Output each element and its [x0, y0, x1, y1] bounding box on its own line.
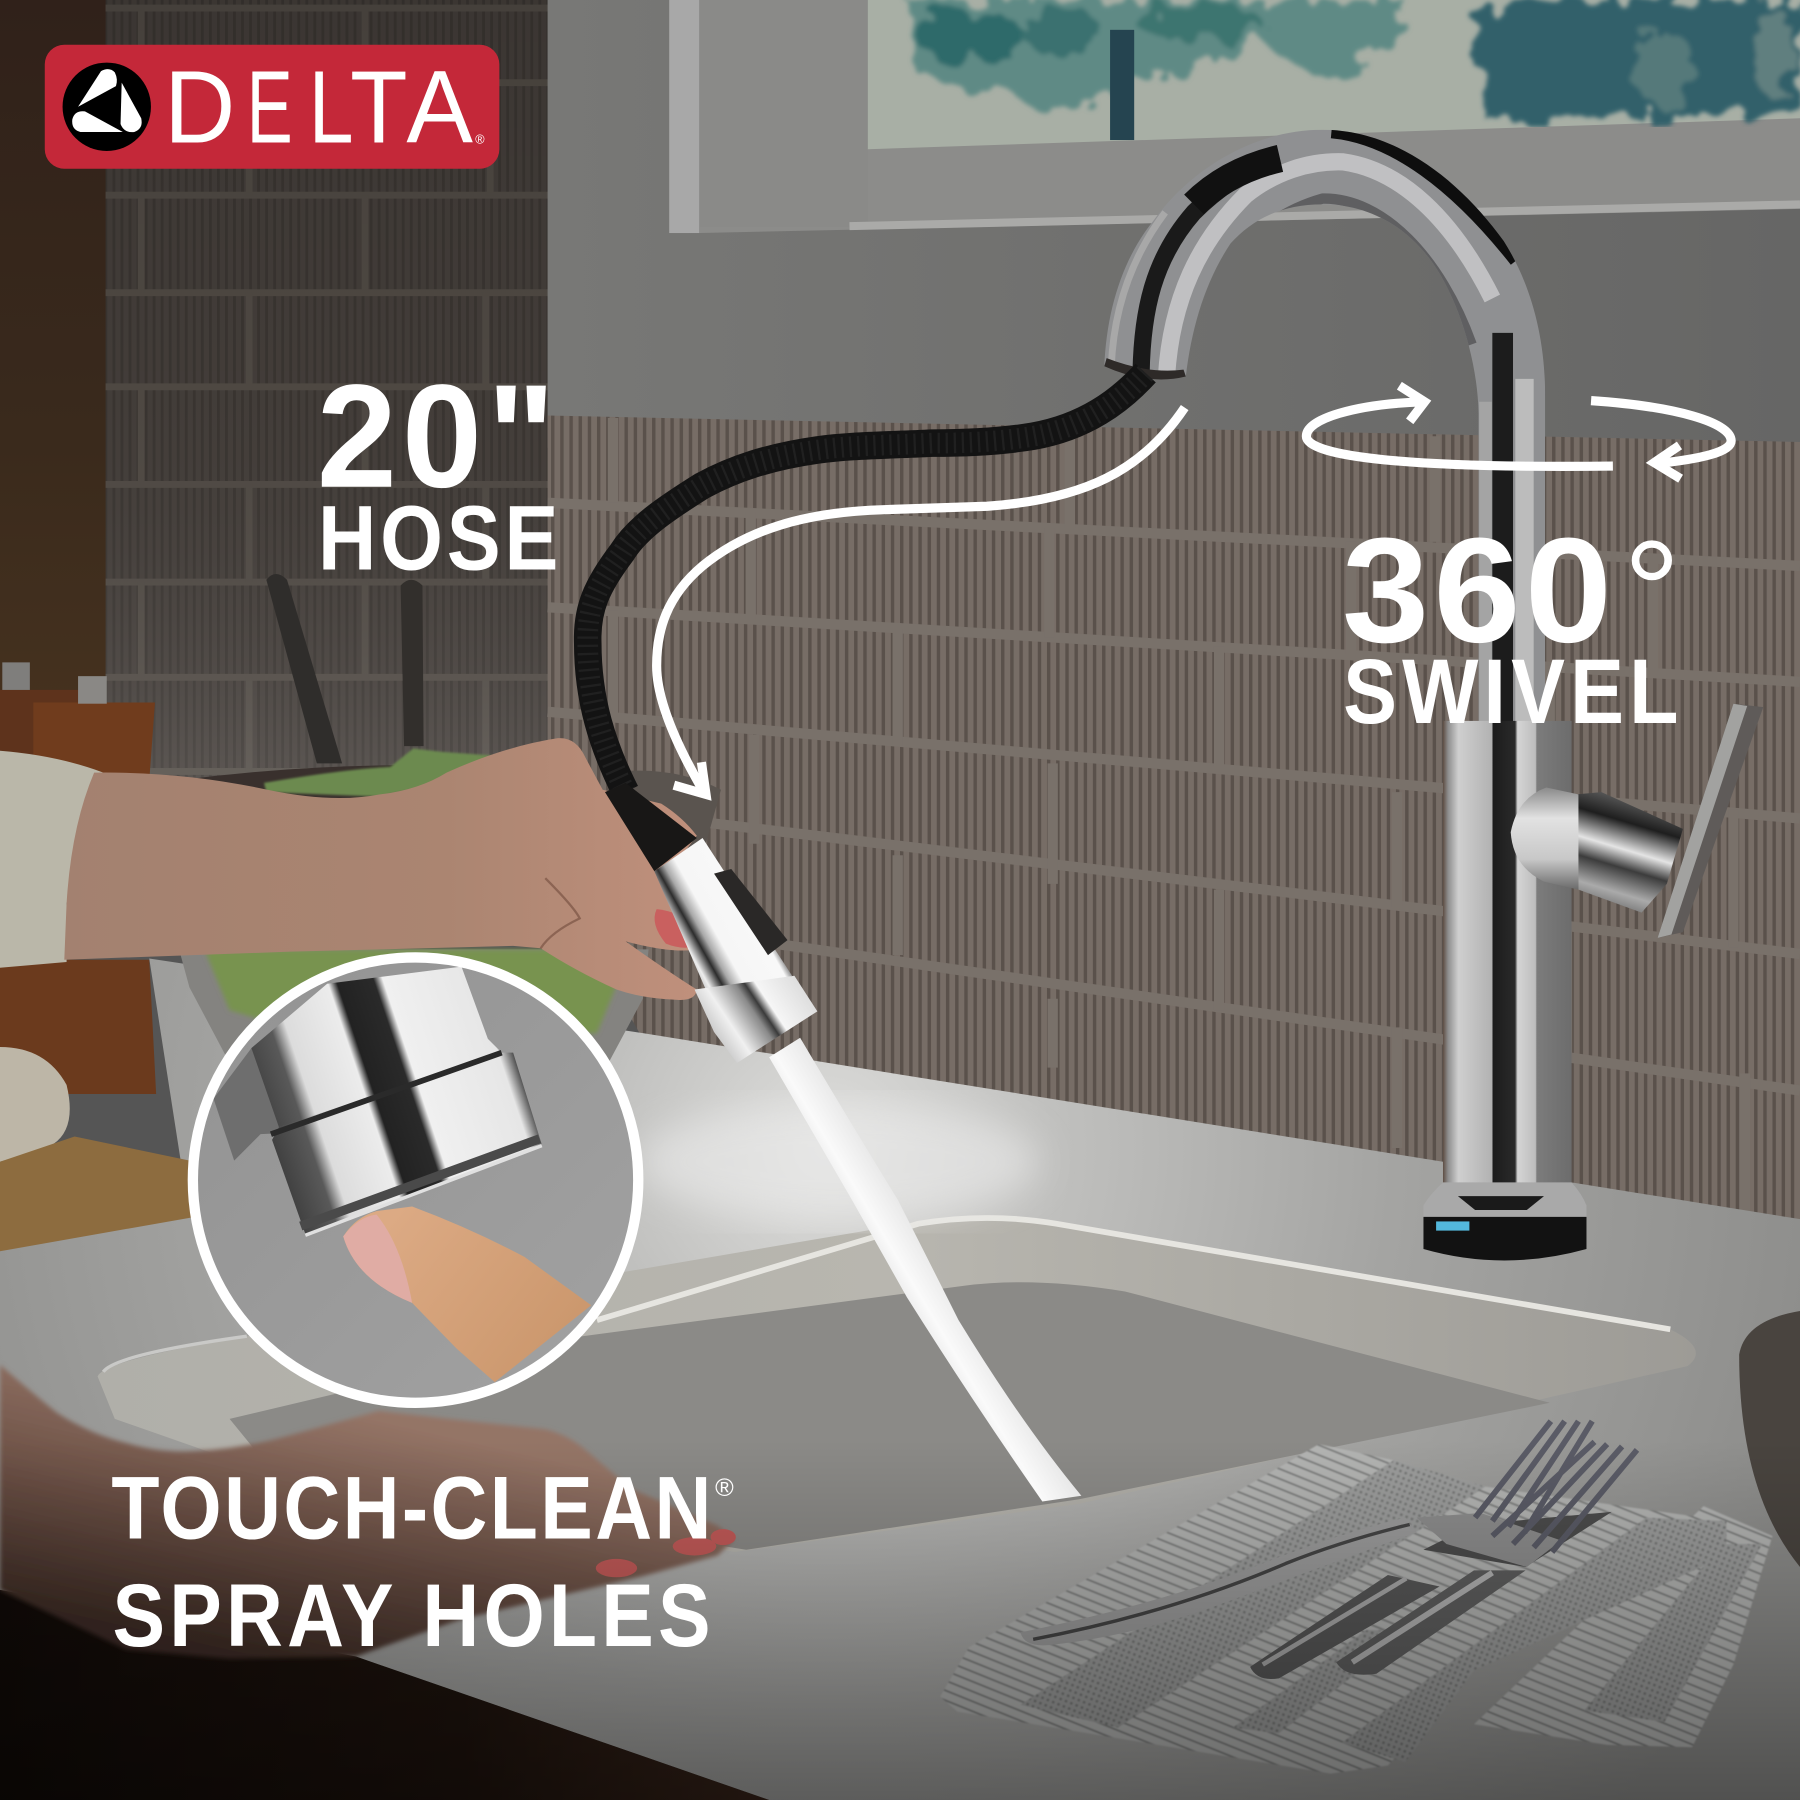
cutting board	[0, 1136, 195, 1251]
hose connector	[605, 783, 697, 871]
pepper mills	[0, 662, 156, 1094]
countertop	[0, 959, 1800, 1800]
gooseneck spout	[1104, 130, 1545, 721]
chrome wand	[654, 838, 792, 1022]
framed tree picture	[868, 0, 1800, 149]
spout outlet	[1104, 358, 1186, 379]
logo wordmark: D	[164, 48, 235, 164]
logo emblem	[63, 63, 151, 151]
metal base flare	[1423, 1182, 1586, 1226]
logo	[45, 45, 499, 169]
handle cylinder	[1576, 792, 1683, 913]
degree symbol: °	[1623, 512, 1681, 672]
hose	[588, 373, 1146, 792]
lower hand	[0, 1365, 735, 1659]
logo wordmark: A	[406, 48, 473, 164]
registered mark: ®	[475, 132, 485, 146]
logo wordmark: E	[247, 48, 293, 164]
fork tines	[1475, 1421, 1637, 1552]
finger nail	[655, 909, 707, 948]
chrome nozzle collar	[695, 976, 817, 1063]
hand crease	[541, 878, 580, 948]
cabinet front in shadow	[0, 1590, 769, 1800]
base shadow detail	[1458, 1196, 1544, 1210]
logo wordmark: T	[350, 48, 408, 164]
spray head	[605, 783, 817, 1063]
lower hand fingernails	[596, 1529, 736, 1577]
window frame and sill	[669, 0, 1800, 233]
touch-clean line: TOUCH-CLEAN	[111, 1458, 711, 1557]
sink basin	[98, 1218, 1696, 1552]
swivel rotation arrows	[1306, 386, 1731, 479]
swivel label	[1342, 507, 1681, 743]
hose label	[317, 353, 558, 590]
hose length arrow	[657, 408, 1185, 794]
grey wall above backsplash	[548, 0, 1800, 448]
spray holes line: SPRAY HOLES	[113, 1565, 711, 1665]
registered mark small: ®	[715, 1474, 734, 1502]
inset: touch-clean spray holes	[188, 953, 643, 1407]
mushrooms	[0, 1047, 70, 1162]
faucet body	[1443, 721, 1572, 1192]
salad servers	[266, 574, 424, 763]
wood cabinet panel	[0, 0, 108, 735]
water stream	[769, 1038, 1081, 1502]
fingernail	[343, 1215, 412, 1303]
touch-clean label	[111, 1458, 734, 1665]
dark brick wall	[106, 0, 608, 804]
hose word: HOSE	[318, 488, 558, 590]
fork handles	[1250, 1575, 1440, 1679]
swivel degree number: 360	[1342, 507, 1612, 674]
fork heads	[1417, 1513, 1561, 1567]
finger	[343, 1207, 591, 1382]
bowl on right	[1739, 1311, 1800, 1567]
long fork handle	[1021, 1518, 1417, 1645]
swivel word: SWIVEL	[1343, 641, 1678, 743]
handle elbow	[1511, 788, 1578, 890]
sink floor	[230, 1282, 1550, 1550]
handle lever	[1658, 704, 1763, 938]
tiled backsplash	[548, 416, 1800, 1228]
knife blade	[1423, 1512, 1612, 1567]
upper hand	[64, 738, 705, 1000]
forks and knife	[1021, 1421, 1637, 1679]
black base with blue light	[1423, 1217, 1586, 1260]
salad bowl	[177, 748, 721, 1063]
logo wordmark: L	[309, 48, 354, 164]
logo wordmark	[164, 48, 473, 164]
counter glow	[637, 1102, 1039, 1221]
hose length number: 20"	[317, 353, 555, 518]
nozzle	[214, 967, 542, 1235]
faucet	[1091, 115, 1763, 1260]
sleeve	[0, 751, 103, 968]
kitchen towels	[940, 1444, 1772, 1774]
spray button	[714, 869, 788, 955]
